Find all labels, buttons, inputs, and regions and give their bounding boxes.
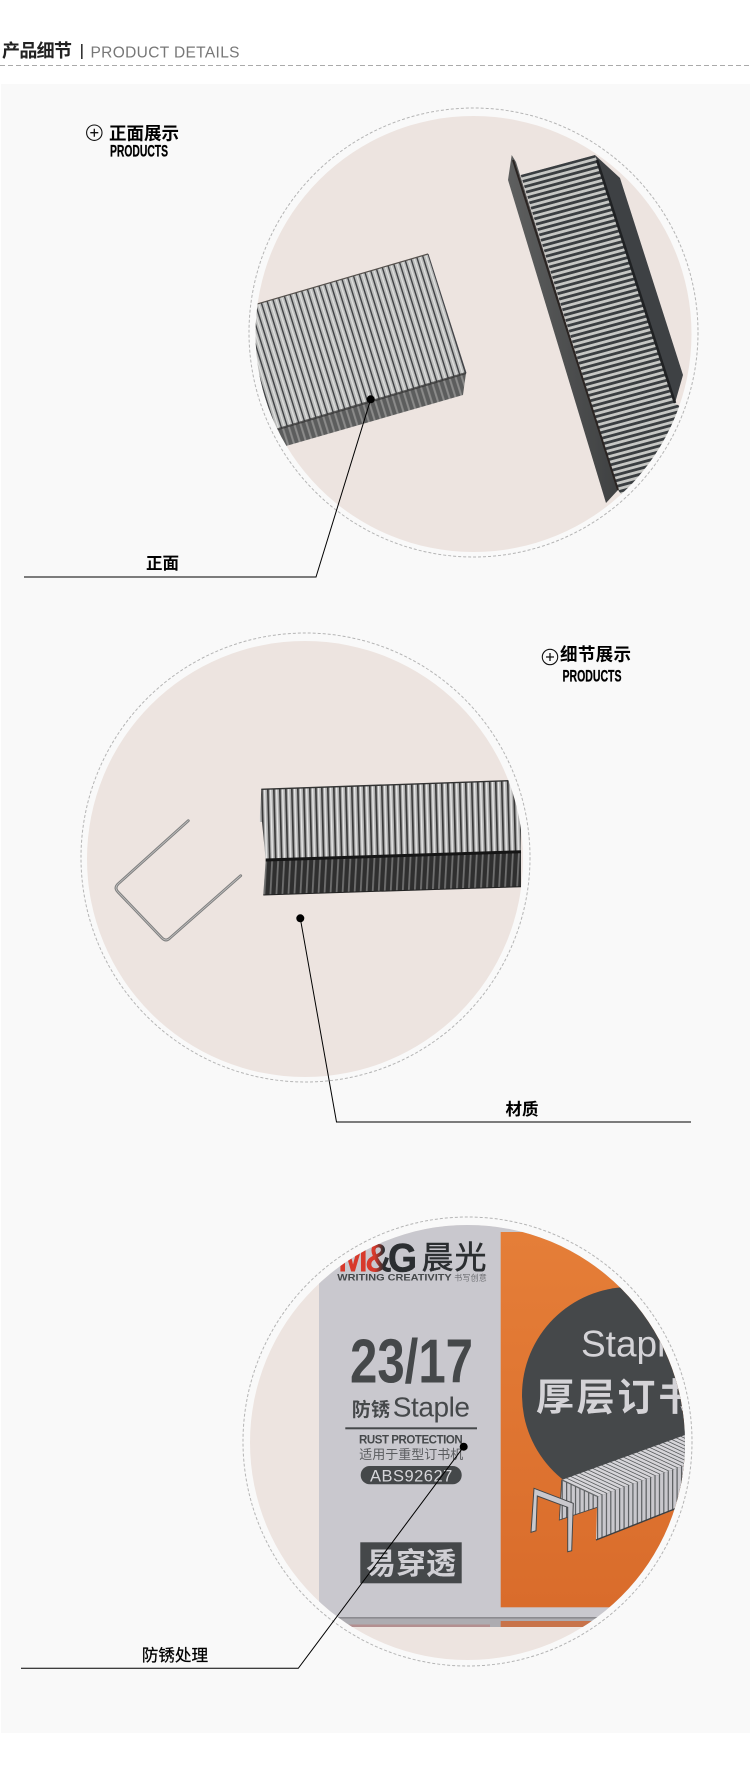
product description: RUST PROTECTION: [359, 1434, 463, 1446]
photo: product box: [319, 1225, 685, 1627]
logo: [337, 1241, 486, 1282]
dark circle graphic: 厚层订书: [536, 1378, 696, 1420]
icon: plus circle: [542, 649, 558, 665]
product name: [353, 1396, 469, 1422]
box: orange face: [501, 1232, 684, 1607]
panel: rust protection: [21, 1217, 738, 1668]
product description: 适用于重型订书机: [359, 1447, 463, 1462]
heading: english title: PRODUCT DETAILS: [90, 44, 240, 61]
single staple: [116, 821, 241, 940]
logo: 晨光: [422, 1240, 486, 1276]
product description: [359, 1434, 463, 1462]
label text: front: 正面: [146, 555, 179, 573]
panel: front view: [24, 108, 700, 577]
logo: WRITING CREATIVITY: [337, 1272, 452, 1282]
box: gray face: [319, 1220, 685, 1618]
product name: 防锈: [352, 1398, 390, 1421]
badge: easy penetration: 易穿透: [366, 1548, 456, 1581]
photo: staple strip and single staple: [116, 780, 521, 940]
logo: 书写创意: [454, 1272, 487, 1282]
callout: rust treatment label: [21, 1443, 468, 1668]
section title: front display: [87, 124, 179, 161]
title text: 正面展示: [109, 124, 179, 144]
logo: M: [338, 1237, 368, 1281]
header separator: [81, 44, 83, 59]
panel: material detail: [81, 633, 691, 1122]
logo: G: [388, 1237, 417, 1281]
model number pill: ABS92627: [370, 1468, 452, 1486]
staple strip: angled side view: [508, 155, 683, 503]
dark circle graphic: [522, 1288, 685, 1497]
product name: Staple: [393, 1392, 470, 1423]
subtitle text: PRODUCTS: [110, 143, 168, 161]
icon: plus circle: [87, 125, 102, 140]
label text: material: 材质: [506, 1099, 538, 1119]
section title: detail display: [542, 644, 631, 686]
callout: front label: [24, 395, 375, 577]
logo: &: [365, 1237, 392, 1281]
circle backdrop: packaging view: [250, 1225, 685, 1660]
section header: [0, 41, 750, 66]
circle backdrop: detail view: [87, 641, 523, 1077]
dark circle graphic: Staple: [581, 1324, 686, 1365]
circle backdrop: front view: [256, 116, 692, 552]
photo: staple strips, front view: [256, 155, 683, 503]
callout: material label: [296, 914, 691, 1122]
title text: 细节展示: [560, 644, 631, 664]
label text: rust treatment: 防锈处理: [142, 1646, 208, 1665]
spec number: 23/17: [350, 1327, 473, 1396]
subtitle text: PRODUCTS: [562, 668, 622, 686]
staple illustration: [531, 1435, 700, 1552]
staple strip: top face: [240, 254, 466, 446]
heading: chinese title: 产品细节: [2, 41, 72, 61]
staple strip: [260, 780, 521, 895]
